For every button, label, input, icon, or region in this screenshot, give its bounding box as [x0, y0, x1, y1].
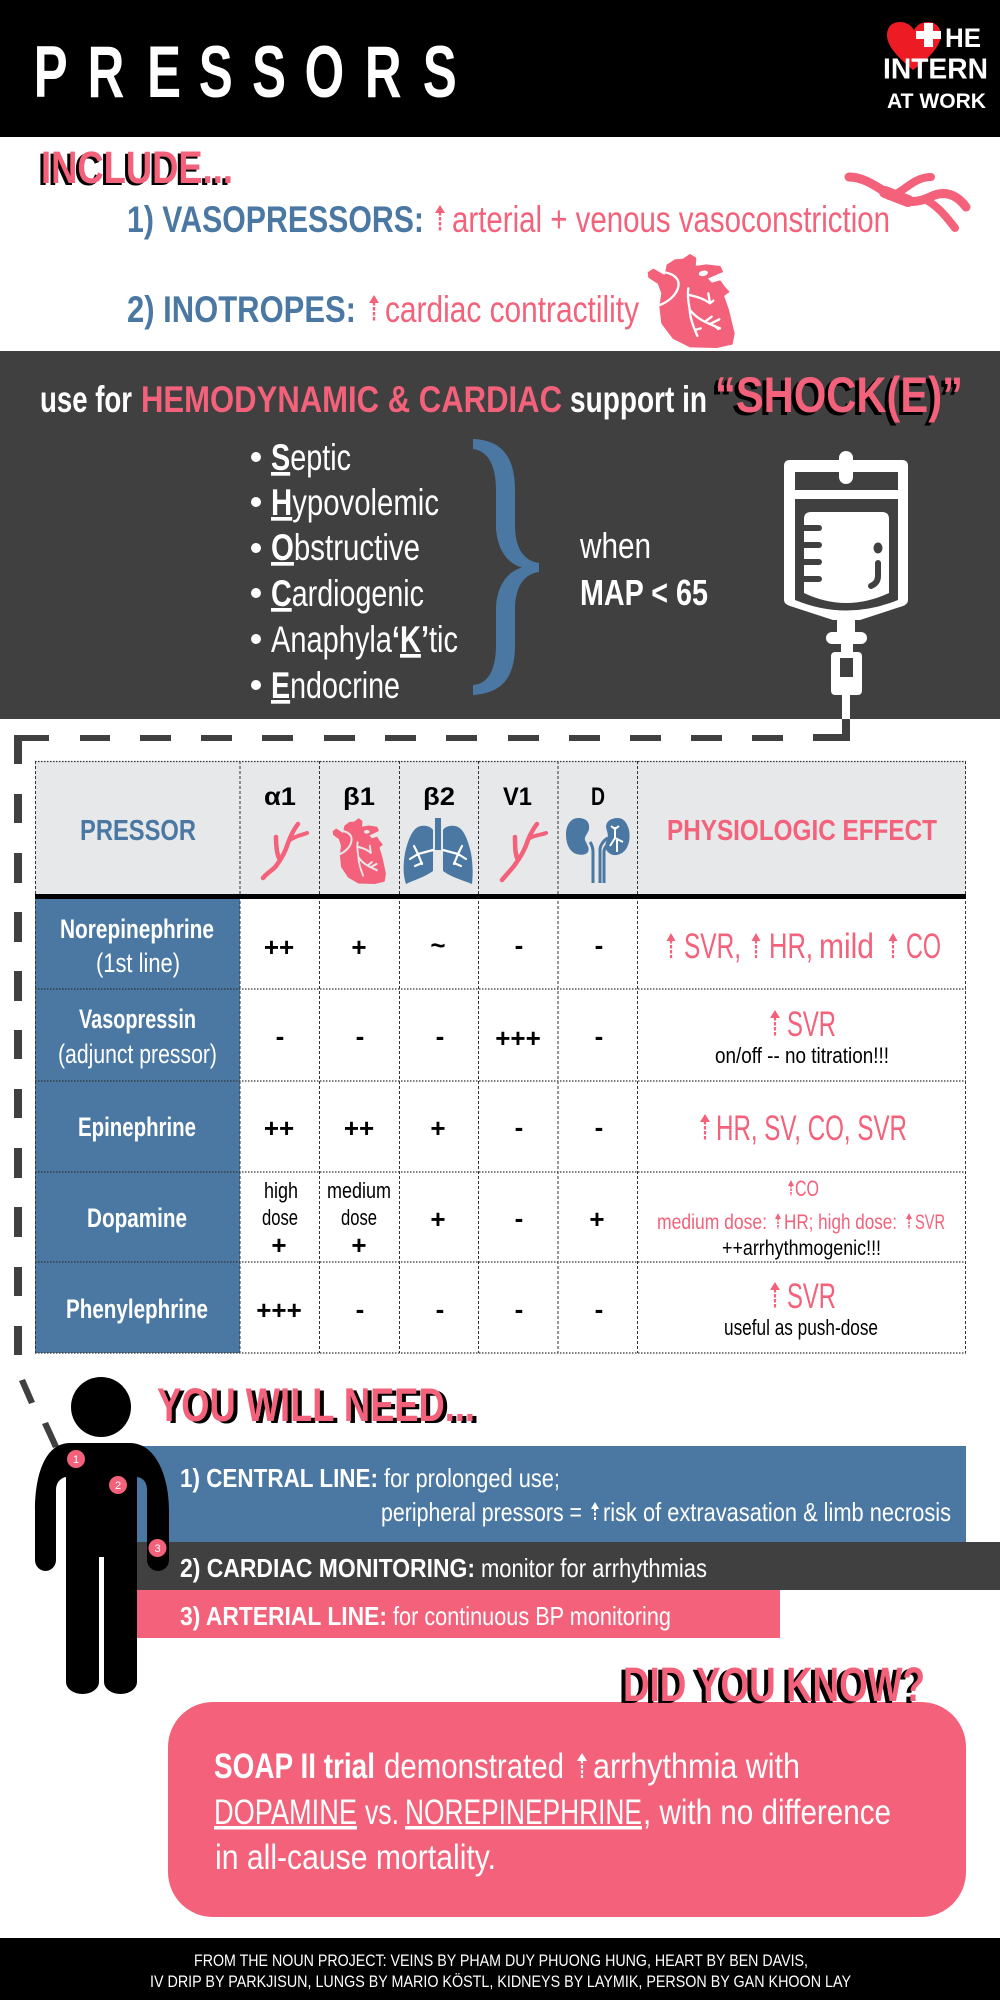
callout: did you know box: demonstrated: [384, 1747, 564, 1786]
effect: svr push dose: [724, 1277, 878, 1340]
marker 3: 3: [154, 1543, 161, 1555]
text: inotropes: [127, 289, 639, 330]
brace: [473, 439, 539, 695]
heading: you will need: YOU WILL NEED...: [161, 1380, 479, 1433]
row: norepinephrine: ++: [264, 932, 294, 962]
icon: heart: [648, 255, 734, 347]
row: dopamine: +: [351, 1230, 367, 1260]
text: when map below 65: when: [579, 525, 651, 566]
row: norepinephrine: ~: [430, 930, 446, 960]
header band: [0, 0, 1000, 137]
effect: co hr svr arrhythmogenic: ++arrhythmogenic!!!: [722, 1237, 881, 1260]
header rule: [35, 894, 966, 899]
row: dopamine: +: [430, 1204, 446, 1234]
row: dopamine: +: [271, 1230, 287, 1260]
effect: svr hr co: mild: [819, 927, 874, 966]
column heading: pressor: PRESSOR: [80, 815, 196, 847]
callout: did you know box: arrhythmia with: [593, 1747, 800, 1786]
effect: co hr svr arrhythmogenic: CO: [795, 1176, 819, 1201]
effect: svr push dose: SVR: [787, 1277, 836, 1316]
callout: did you know box: NOREPINEPHRINE: [405, 1793, 642, 1832]
effect: svr on off: [715, 1005, 889, 1068]
column heading: beta 1: β1: [343, 783, 375, 811]
column heading: physiologic effect: PHYSIOLOGIC EFFECT: [667, 815, 937, 847]
heading: include: INCLUDE...: [41, 142, 233, 193]
logo: the intern at work: INTERN: [883, 54, 988, 86]
row: dopamine: -: [515, 1203, 523, 1233]
effect: hr sv co svr: [700, 1109, 907, 1148]
logo: the intern at work: [883, 22, 988, 113]
marker 1: [67, 1450, 85, 1468]
list: types of shock: Endocrine: [271, 665, 400, 706]
row: epinephrine: ++: [264, 1113, 294, 1143]
effect: co hr svr arrhythmogenic: [657, 1176, 945, 1260]
row: phenylephrine: -: [436, 1294, 444, 1324]
row: phenylephrine: [66, 1277, 878, 1340]
effect: hr sv co svr: HR, SV, CO, SVR: [716, 1109, 907, 1148]
row: norepinephrine: -: [595, 930, 603, 960]
text: inotropes: 2) INOTROPES:: [127, 289, 356, 330]
panel: central line: for prolonged use;: [384, 1463, 560, 1493]
row: dopamine: dose: [262, 1205, 298, 1230]
text: vasopressors: arterial + venous vasoconstriction: [452, 199, 890, 240]
row: norepinephrine: Norepinephrine: [60, 914, 214, 944]
panel: cardiac monitoring: 2) CARDIAC MONITORING:: [180, 1553, 475, 1583]
row: vasopressin: [58, 1004, 889, 1069]
list: types of shock: [251, 437, 458, 706]
row: dopamine: Dopamine: [87, 1203, 187, 1233]
footer: credits: IV DRIP BY PARKJISUN, LUNGS BY MARIO KÖSTL, KIDNEYS BY LAYMIK, PERSON BY GAN KHOON LAY: [150, 1972, 851, 1991]
row: vasopressin: (adjunct pressor): [58, 1039, 217, 1069]
panel: central line: 1) CENTRAL LINE:: [180, 1463, 378, 1493]
row: dopamine: high: [264, 1178, 298, 1203]
panel: central line: peripheral pressors =: [381, 1497, 582, 1527]
row: vasopressin: -: [356, 1021, 364, 1051]
icon: vessel v1: [502, 824, 546, 880]
row: vasopressin: Vasopressin: [79, 1004, 196, 1034]
panel: shock band: [0, 351, 1000, 719]
table: pressors: [35, 761, 966, 1353]
row: phenylephrine: -: [515, 1294, 523, 1324]
list: types of shock: Hypovolemic: [271, 482, 439, 523]
list: types of shock: Obstructive: [271, 527, 420, 568]
effect: svr hr co: CO: [906, 927, 941, 966]
effect: svr hr co: [666, 927, 941, 966]
marker 1: 1: [73, 1454, 79, 1466]
heading: hemodynamic support: HEMODYNAMIC & CARDIAC: [141, 379, 562, 420]
list: types of shock: Cardiogenic: [271, 573, 424, 614]
logo: the intern at work: AT WORK: [887, 90, 986, 113]
effect: svr on off: on/off -- no titration!!!: [715, 1043, 889, 1068]
row: vasopressin: -: [436, 1021, 444, 1051]
row: vasopressin: -: [595, 1021, 603, 1051]
callout: did you know box: DOPAMINE: [214, 1793, 357, 1832]
row: dopamine: [87, 1176, 945, 1260]
row: epinephrine: -: [515, 1112, 523, 1142]
list: types of shock: Septic: [271, 437, 351, 478]
heading: hemodynamic support: [40, 367, 963, 426]
heading: hemodynamic support: “SHOCK(E)”: [711, 370, 959, 426]
callout: did you know box: in all-cause mortality.: [215, 1838, 496, 1877]
callout: did you know box: SOAP II trial: [214, 1747, 375, 1786]
row: norepinephrine: [60, 914, 941, 978]
heading: hemodynamic support: support in: [570, 379, 707, 420]
row: phenylephrine: Phenylephrine: [66, 1294, 208, 1324]
effect: co hr svr arrhythmogenic: HR; high dose:: [784, 1211, 897, 1234]
row: phenylephrine: -: [595, 1294, 603, 1324]
footer: credits: [0, 1938, 1000, 2000]
column heading: v1: V1: [503, 783, 532, 811]
logo: the intern at work: HE: [945, 23, 981, 53]
row: epinephrine: [78, 1109, 907, 1148]
row: norepinephrine: -: [515, 930, 523, 960]
icon: heart beta 1: [333, 819, 386, 884]
list: types of shock: Anaphyla‘K’tic: [271, 619, 458, 660]
effect: co hr svr arrhythmogenic: medium dose:: [657, 1211, 767, 1234]
dashed line from iv to patient: [14, 719, 850, 1448]
row: epinephrine: +: [430, 1113, 446, 1143]
row: dopamine: medium: [327, 1178, 391, 1203]
row: epinephrine: -: [595, 1112, 603, 1142]
row: epinephrine: Epinephrine: [78, 1112, 196, 1142]
text: vasopressors: [127, 199, 890, 240]
panel: arterial line: 3) ARTERIAL LINE:: [180, 1601, 387, 1631]
effect: svr hr co: HR,: [769, 927, 813, 966]
text: when map below 65: [579, 525, 708, 613]
row: norepinephrine: +: [351, 932, 367, 962]
row: norepinephrine: (1st line): [96, 948, 180, 978]
effect: svr hr co: SVR,: [684, 927, 741, 966]
callout: did you know box: vs.: [365, 1793, 399, 1832]
panel: central line: [137, 1446, 966, 1542]
panel: arterial line: for continuous BP monitoring: [393, 1601, 671, 1631]
panel: cardiac monitoring: [137, 1542, 1000, 1590]
marker 2: [109, 1476, 127, 1494]
marker 2: 2: [115, 1480, 121, 1492]
callout: did you know box: , with no difference: [643, 1793, 891, 1832]
text: when map below 65: MAP < 65: [580, 572, 708, 613]
column heading: beta 2: β2: [423, 783, 455, 811]
row: dopamine: +: [589, 1204, 605, 1234]
icon: lungs beta 2: [404, 818, 473, 884]
effect: co hr svr arrhythmogenic: SVR: [915, 1211, 945, 1234]
heading: hemodynamic support: use for: [40, 379, 132, 420]
effect: svr push dose: useful as push-dose: [724, 1315, 878, 1340]
heading: include: INCLUDE...: [38, 144, 230, 195]
panel: cardiac monitoring: monitor for arrhythmias: [481, 1553, 707, 1583]
icon: vein: [849, 177, 966, 228]
heading: you will need: YOU WILL NEED...: [157, 1378, 475, 1431]
table header background: [35, 761, 966, 894]
title: PRESSORS: [34, 32, 457, 113]
row: vasopressin: -: [276, 1021, 284, 1051]
icon: iv bag: [784, 451, 908, 719]
footer: credits: FROM THE NOUN PROJECT: VEINS BY PHAM DUY PHUONG HUNG, HEART BY BEN DAVIS,: [194, 1951, 808, 1970]
row: epinephrine: ++: [344, 1113, 374, 1143]
row: dopamine: dose: [341, 1205, 377, 1230]
row: phenylephrine: +++: [256, 1295, 302, 1325]
callout: did you know box: [168, 1702, 966, 1917]
column heading: d: D: [591, 783, 605, 811]
marker 3: [148, 1539, 166, 1557]
panel: arterial line: [137, 1590, 780, 1638]
column heading: alpha 1: α1: [264, 783, 296, 811]
icon: kidneys d: [566, 818, 630, 883]
effect: svr on off: SVR: [787, 1005, 836, 1044]
text: inotropes: cardiac contractility: [385, 289, 639, 330]
row: phenylephrine: -: [356, 1294, 364, 1324]
icon: person: [35, 1377, 169, 1694]
text: vasopressors: 1) VASOPRESSORS:: [127, 199, 424, 240]
pressor name column background: [35, 899, 240, 1353]
icon: vessel alpha 1: [263, 824, 307, 878]
row: vasopressin: +++: [495, 1023, 541, 1053]
